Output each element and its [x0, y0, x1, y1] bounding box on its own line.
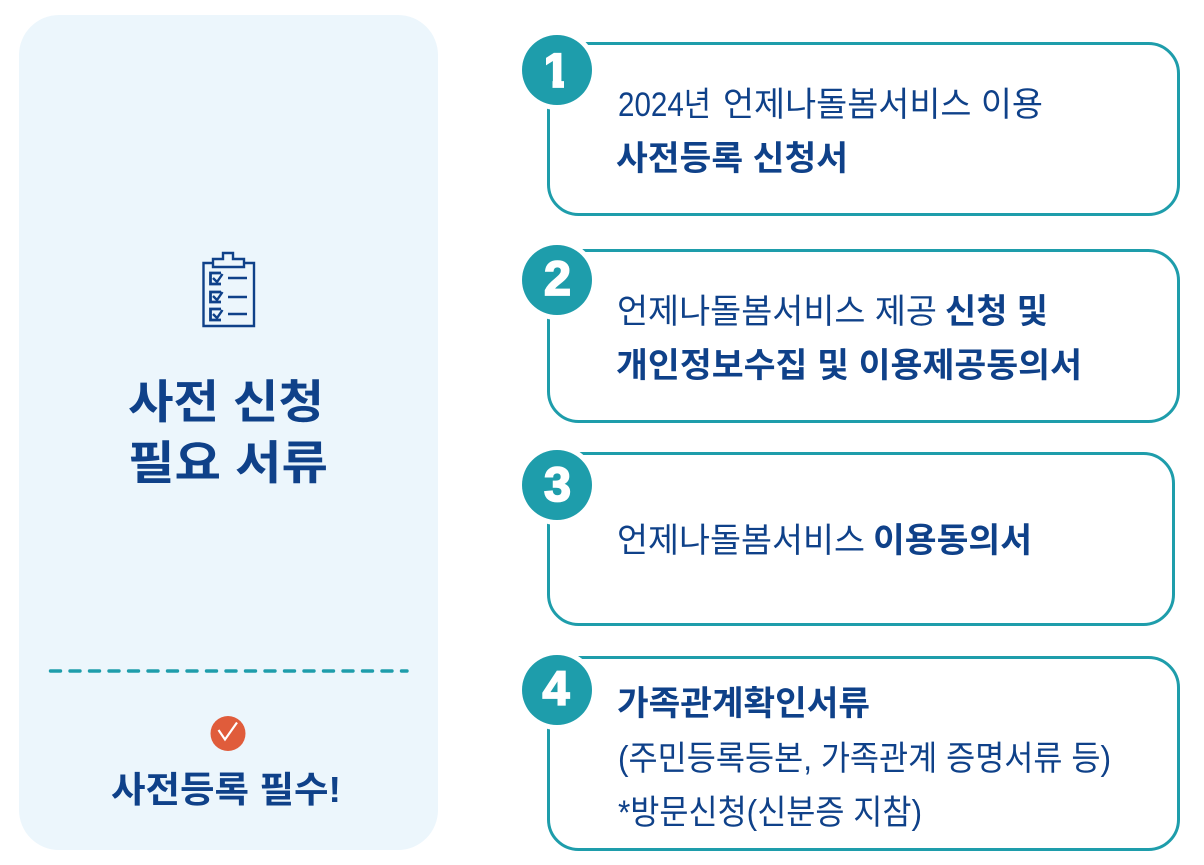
icon: clipboard checklist [204, 253, 254, 326]
text: item 3 description: 언제나돌봄서비스 [617, 522, 865, 560]
heading: panel title: 사전 신청 [128, 376, 324, 428]
panel: item 3 [517, 445, 1174, 624]
text: item 3 description [617, 522, 1032, 560]
text: item 2 description [616, 293, 1082, 385]
badge: number 2 [522, 245, 592, 315]
badge: number 3: 3 [544, 459, 571, 512]
text: item 2 description: 신청 및 [945, 293, 1048, 331]
text: item 4 description: 가족관계확인서류 [617, 685, 870, 723]
panel: item 1 [517, 30, 1178, 214]
heading: panel title: 필요 서류 [128, 437, 328, 489]
text: item 4 description: *방문신청(신분증 지참) [618, 794, 922, 832]
text: item 1 description: 언제나돌봄서비스 이용 [723, 86, 1043, 124]
text: item 1 description: 사전등록 신청서 [616, 140, 848, 178]
badge: number 3 [522, 450, 592, 520]
panel: required documents summary [19, 15, 438, 850]
badge: number 1 [522, 35, 592, 105]
panel: item 4 [517, 650, 1178, 850]
heading: panel title [128, 376, 328, 489]
badge: number 2: 2 [544, 253, 571, 306]
text: item 1 description [616, 86, 1043, 178]
badge: number 4 [522, 655, 592, 725]
text: pre-registration required: 사전등록 필수! [111, 769, 341, 810]
badge: number 4: 4 [542, 663, 570, 716]
text: item 1 description: 2024년 [618, 86, 711, 124]
text: item 2 description: 언제나돌봄서비스 제공 [617, 293, 937, 331]
text: item 2 description: 개인정보수집 및 이용제공동의서 [616, 347, 1082, 385]
badge: number 1: 1 [542, 45, 570, 98]
panel: item 2 [517, 240, 1178, 422]
icon: orange check badge [210, 716, 246, 751]
text: item 3 description: 이용동의서 [873, 522, 1032, 560]
text: item 4 description: (주민등록등본, 가족관계 증명서류 등) [618, 740, 1111, 778]
text: item 4 description [617, 685, 1111, 832]
